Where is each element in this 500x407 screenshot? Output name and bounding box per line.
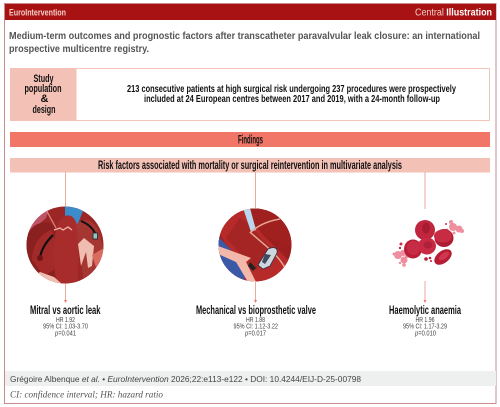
label: mechanical vs bioprosthetic valve: HR 1.88 [246, 317, 265, 324]
citation band: Grégoire Albenque et al. • EuroIntervention 2026;22:e113-e122 • DOI: 10.4244/EIJ-D-25-00798 [10, 374, 361, 384]
ruptured cell fragments right [445, 220, 464, 234]
label: mitral vs aortic leak: p=0.041 [54, 330, 76, 338]
title: prospective multicentre registry. [9, 44, 149, 55]
label: mechanical vs bioprosthetic valve: p=0.017 [244, 330, 266, 338]
label: mechanical vs bioprosthetic valve [196, 305, 316, 338]
label: haemolytic anaemia: Haemolytic anaemia [389, 305, 461, 317]
label: haemolytic anaemia: p=0.010 [414, 330, 436, 338]
arrow: mitral [64, 172, 67, 303]
risk factors bar [10, 158, 490, 172]
label: haemolytic anaemia [389, 305, 461, 338]
label: mitral vs aortic leak: Mitral vs aortic leak [30, 305, 101, 317]
ruptured cell fragments left [392, 242, 409, 267]
label: mechanical vs bioprosthetic valve: Mechanical vs bioprosthetic valve [196, 305, 316, 317]
label: haemolytic anaemia: 95% CI: 1.17-3.29 [403, 324, 447, 330]
study label cell [10, 68, 76, 121]
study label cell: & [40, 93, 48, 105]
arrow: mechanical [254, 172, 257, 303]
findings bar: Findings [238, 134, 263, 146]
whole cells [404, 220, 455, 268]
label: mitral vs aortic leak: HR 1.92 [56, 317, 75, 324]
study label cell: population [24, 83, 62, 95]
label: mechanical vs bioprosthetic valve: 95% CI: 1.12-3.22 [234, 324, 278, 330]
study label cell: Study [34, 73, 54, 85]
icon: red blood cells [392, 220, 464, 268]
icon: heart mitral leak [26, 206, 104, 284]
findings bar [10, 132, 490, 147]
abbreviations footnote: CI: confidence interval; HR: hazard ratio [10, 390, 163, 400]
central illustration label: Central Illustration [415, 8, 492, 18]
study label cell: design [32, 104, 56, 116]
arrow: haemolytic [424, 172, 426, 303]
label: haemolytic anaemia: HR 1.96 [416, 317, 435, 324]
journal name: EuroIntervention [9, 8, 66, 18]
header bar [5, 4, 496, 20]
study description [127, 83, 456, 105]
label: mitral vs aortic leak: 95% CI: 1.03-3.70 [43, 324, 88, 330]
label: mitral vs aortic leak [30, 305, 101, 338]
citation band [5, 371, 496, 386]
panel: study population and design [10, 68, 490, 121]
title [9, 31, 480, 55]
icon: mechanical valve [218, 208, 298, 282]
